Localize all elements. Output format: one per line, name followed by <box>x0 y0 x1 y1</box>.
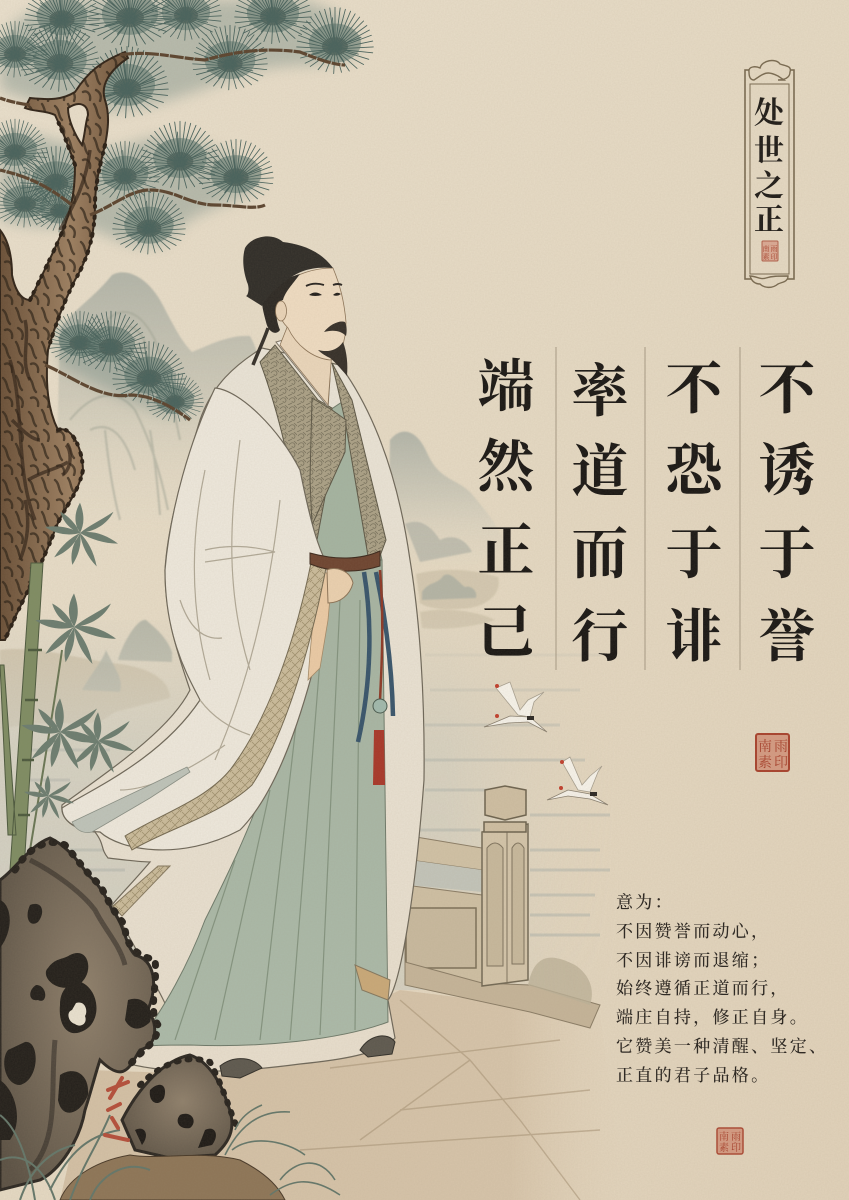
mountain folds <box>70 312 180 520</box>
red cord <box>380 570 382 700</box>
seal script: 印 <box>774 755 788 771</box>
verse column 4: 己 <box>478 602 534 665</box>
rock through-hole <box>68 1003 86 1026</box>
rock holes <box>0 900 151 1140</box>
verse column 3: 道 <box>572 441 628 504</box>
grass and red flowers <box>0 1078 340 1200</box>
small rock bumpy rim <box>140 1059 236 1125</box>
distant mountains <box>0 272 505 730</box>
bottom scroll ornament <box>750 276 788 287</box>
red blossoms <box>105 1078 128 1140</box>
verse column 2: 于 <box>666 523 722 586</box>
soft canopy mass <box>0 0 356 415</box>
verse column 3 <box>572 361 630 669</box>
stone base <box>405 962 600 1028</box>
right robe lining <box>355 965 390 1000</box>
railing lower slab <box>405 885 482 985</box>
verse column 2: 不 <box>666 358 724 421</box>
seal script <box>758 738 788 771</box>
small red seal: 南 <box>762 244 770 253</box>
blue sash ties <box>358 572 393 742</box>
explanation text: 正直的君子品格。 <box>616 1066 770 1085</box>
railing gap <box>410 860 482 892</box>
cartouche frame <box>745 70 794 279</box>
far trees right shore <box>422 574 476 600</box>
rock bumpy rim <box>15 842 158 1065</box>
post faces <box>487 830 524 982</box>
skirt folds <box>175 600 360 1040</box>
railing top rail <box>410 836 482 870</box>
sleeve brocade trim <box>125 558 326 850</box>
top scroll ornament <box>749 61 790 80</box>
seal block <box>756 734 789 771</box>
verse column 3: 行 <box>572 606 628 669</box>
verse column 3: 而 <box>572 523 628 586</box>
cartouche title text: 世 <box>754 135 784 168</box>
neck <box>280 325 332 405</box>
left mountain range <box>55 272 258 530</box>
right mountain range <box>388 432 505 568</box>
explanation text: 始终遵循正道而行， <box>616 979 790 998</box>
sash belt <box>310 551 380 571</box>
crane two <box>547 757 608 805</box>
ground paving <box>60 990 625 1200</box>
hat ribbon <box>253 328 268 365</box>
peach sleeve lining <box>308 570 332 680</box>
ear <box>276 301 286 321</box>
small rock holes <box>135 1085 216 1148</box>
shore shrubs <box>528 958 592 1005</box>
rock ridge <box>30 860 125 1170</box>
seal script: 南 <box>758 738 772 755</box>
scholar rock large <box>0 838 158 1190</box>
post cap <box>484 786 526 832</box>
seal script: 素 <box>719 1141 729 1154</box>
seal script: 素 <box>758 755 772 771</box>
seal block <box>717 1128 743 1154</box>
right collar brocade <box>332 363 386 556</box>
bamboo stalks <box>0 563 43 870</box>
explanation text <box>616 893 828 1085</box>
moustache <box>324 321 347 336</box>
verse column 2: 诽 <box>666 606 722 669</box>
small red seal <box>762 241 778 261</box>
scholar rock small <box>122 1055 236 1158</box>
seal script: 雨 <box>731 1131 741 1143</box>
verse column 3: 率 <box>572 361 630 424</box>
trunk <box>0 52 128 640</box>
bamboo <box>0 503 134 870</box>
trunk hole <box>68 104 88 145</box>
sleeve blue lining roll <box>72 767 190 833</box>
hat <box>243 236 333 306</box>
rail post <box>482 824 528 986</box>
cranes <box>484 682 608 805</box>
left shore land <box>0 649 170 730</box>
hand <box>327 569 353 603</box>
bark marks <box>10 150 90 560</box>
floor slabs <box>60 990 625 1200</box>
bamboo nodes <box>18 650 42 815</box>
verse column 1: 誉 <box>758 606 816 669</box>
far shore right <box>416 570 499 629</box>
robe hem trim left <box>113 866 170 916</box>
shoes <box>220 1036 395 1078</box>
verse column 4: 然 <box>478 436 538 499</box>
explanation text: 端庄自持，修正自身。 <box>616 1007 809 1027</box>
inner frame <box>750 84 789 274</box>
pine tree <box>0 0 373 640</box>
explanation text: 它赞美一种清醒、坚定、 <box>616 1036 828 1056</box>
verse column 4: 端 <box>478 356 534 419</box>
red seal bottom <box>717 1128 743 1154</box>
green chest <box>300 400 382 560</box>
front white sleeve <box>62 388 335 850</box>
sleeve drape folds <box>120 440 280 790</box>
brows <box>306 284 342 286</box>
right mountain foothill trees <box>405 522 472 562</box>
seal script: 雨 <box>774 739 788 755</box>
cross-collar band <box>310 398 346 525</box>
water <box>0 620 620 990</box>
cartouche title text: 正 <box>754 204 784 237</box>
cartouche title text <box>754 97 786 237</box>
carved panel <box>406 908 476 968</box>
thin twig <box>30 650 62 850</box>
far trees left shore <box>82 620 172 692</box>
jade pendant <box>373 699 387 713</box>
seal script: 南 <box>719 1130 729 1143</box>
grass blades right <box>225 1105 340 1195</box>
cartouche title text: 处 <box>754 97 786 130</box>
floor joints <box>300 1000 600 1200</box>
wave lines <box>20 655 610 935</box>
verse column 1: 于 <box>758 523 816 586</box>
explanation text: 不因赞誉而动心， <box>616 921 770 941</box>
white inner collar <box>276 338 330 407</box>
pine needle clusters <box>0 0 373 422</box>
small rock body <box>122 1055 232 1158</box>
grass blades left <box>0 1115 150 1200</box>
bumpy bark edge <box>5 115 105 640</box>
small red seal: 雨 <box>770 245 778 253</box>
explanation text: 不因诽谤而退缩； <box>616 951 770 970</box>
goatee <box>318 342 347 376</box>
verse column 1 <box>758 358 818 669</box>
branches <box>0 50 345 420</box>
outer white robe <box>62 348 424 1071</box>
green skirt <box>133 560 388 1048</box>
scholar figure <box>62 236 424 1078</box>
verse column 4 <box>478 356 538 665</box>
column dividers <box>556 347 740 670</box>
stone balustrade <box>405 786 600 1028</box>
face <box>275 268 346 360</box>
small red seal: 印 <box>770 252 778 261</box>
water body <box>0 648 498 990</box>
red tassel <box>373 730 385 785</box>
red seal middle <box>756 734 789 771</box>
verse column 4: 正 <box>478 520 534 583</box>
cartouche title text: 之 <box>754 170 784 203</box>
main verse <box>478 356 818 669</box>
seal script: 印 <box>731 1141 741 1154</box>
rock body <box>0 838 155 1190</box>
earth mound <box>60 1155 285 1200</box>
crane one <box>484 682 547 732</box>
hair at temple <box>262 274 300 333</box>
eyes <box>309 292 341 296</box>
small red seal: 素 <box>762 252 770 261</box>
verse column 1: 不 <box>758 358 818 421</box>
verse column 1: 诱 <box>758 440 816 503</box>
seal script <box>719 1130 741 1154</box>
verse column 2 <box>666 358 728 669</box>
left collar brocade <box>260 345 332 556</box>
bark texture <box>0 52 128 640</box>
title cartouche <box>745 61 794 287</box>
explanation text: 意为： <box>616 893 674 912</box>
bamboo leaves <box>21 503 134 819</box>
verse column 2: 恐 <box>666 440 728 503</box>
